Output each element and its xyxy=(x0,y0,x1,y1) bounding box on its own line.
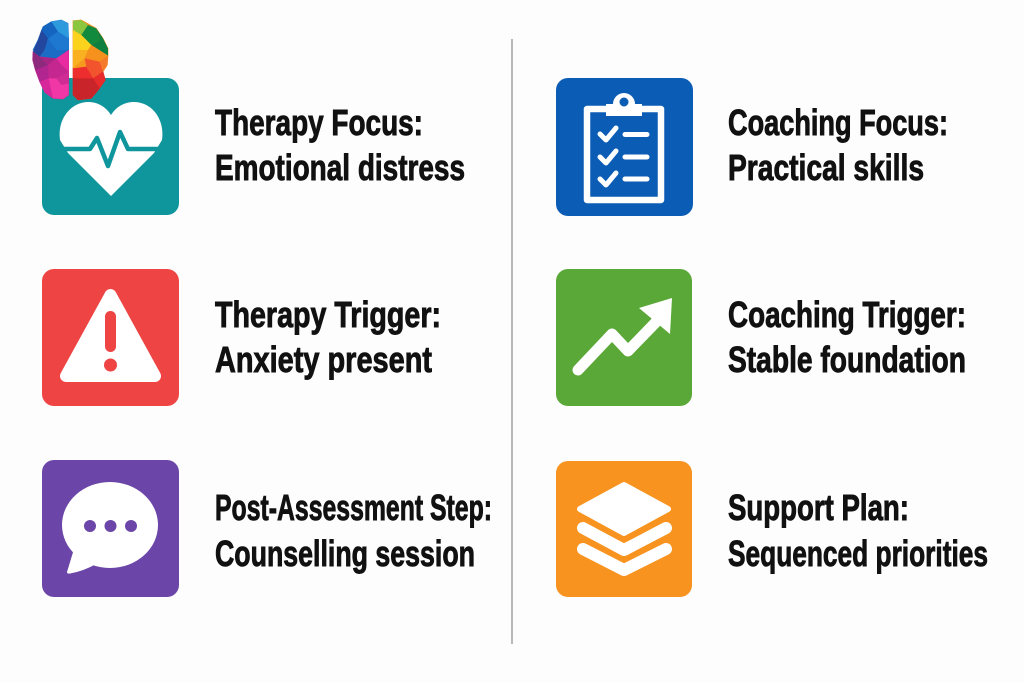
icon: red warning triangle xyxy=(42,269,179,406)
icon: brain logo xyxy=(33,20,108,100)
text: therapy trigger: Therapy Trigger: xyxy=(215,294,441,335)
text: coaching trigger xyxy=(728,294,966,380)
text: post-assessment step: Post-Assessment Step: xyxy=(215,487,492,528)
text: coaching trigger: Stable foundation xyxy=(728,339,966,380)
icon: teal heart with pulse xyxy=(42,78,179,215)
text: therapy trigger: Anxiety present xyxy=(215,339,432,380)
icon: purple speech bubble xyxy=(42,460,179,597)
text: support plan: Support Plan: xyxy=(728,487,909,528)
text: post-assessment step: Counselling session xyxy=(215,533,475,574)
icon: orange stacked layers xyxy=(556,461,692,597)
icon: green rising arrow xyxy=(556,269,692,406)
text: support plan xyxy=(728,487,988,574)
text: therapy focus: Emotional distress xyxy=(215,147,465,188)
icon: blue clipboard checklist xyxy=(556,78,693,216)
text: coaching focus: Practical skills xyxy=(728,147,924,188)
text: post-assessment step xyxy=(215,487,492,574)
text: therapy focus xyxy=(215,102,465,188)
text: therapy trigger xyxy=(215,294,441,380)
text: coaching focus: Coaching Focus: xyxy=(728,102,948,143)
text: coaching focus xyxy=(728,102,948,188)
text: therapy focus: Therapy Focus: xyxy=(215,102,423,143)
